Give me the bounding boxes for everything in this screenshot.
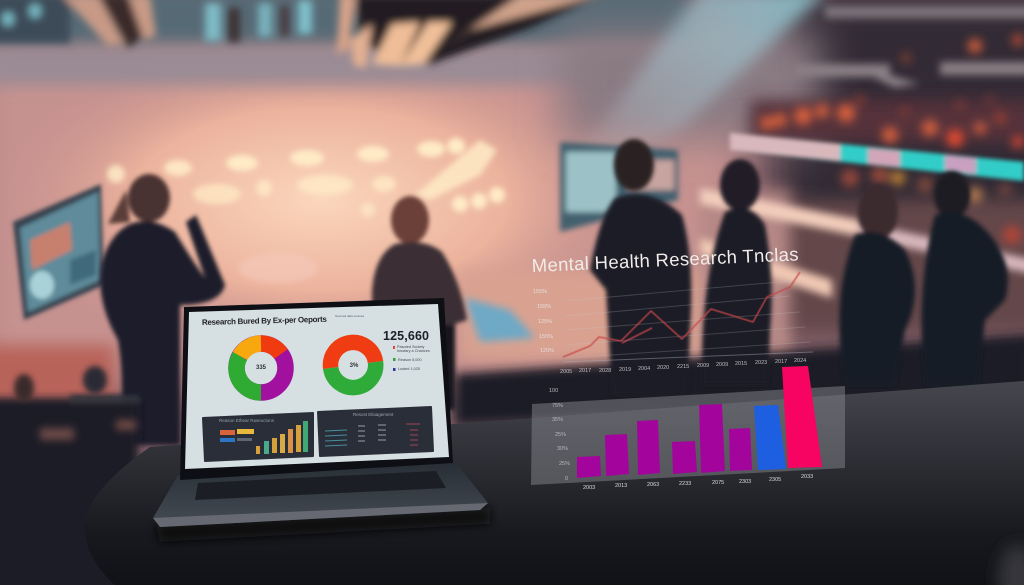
laptop screen <box>185 304 449 469</box>
background: light beam <box>560 0 828 180</box>
line chart x labels: 2009 <box>716 362 728 368</box>
left stage lights <box>107 138 505 283</box>
line chart axis <box>563 352 813 362</box>
silhouette: two men in suits <box>590 139 772 395</box>
bar chart x labels: 2305 <box>769 477 781 483</box>
dashboard legend: Pasoted Scolety <box>397 345 425 349</box>
dashboard legend <box>393 345 430 371</box>
line chart x labels: 2005 <box>560 369 572 375</box>
bar chart x labels: 2303 <box>739 479 751 485</box>
background: ceiling trusses <box>0 0 600 68</box>
bar chart y labels: 30% <box>557 446 568 452</box>
back rail band <box>455 334 1024 425</box>
line chart: Mental Health Research Trends <box>531 243 813 375</box>
bar chart y labels: 0 <box>565 476 568 482</box>
dark railing left <box>0 366 140 585</box>
laptop base front edge <box>153 503 488 527</box>
table <box>84 381 1024 585</box>
line chart x labels: 2023 <box>755 360 767 366</box>
bar chart <box>549 366 822 491</box>
line chart y labels: 155% <box>539 334 553 340</box>
bar chart y labels: 25% <box>559 461 570 467</box>
donut chart 1 <box>236 344 286 392</box>
line chart x labels: 2017 <box>579 368 591 374</box>
bar chart x labels: 2075 <box>712 480 724 486</box>
line chart x labels: 2015 <box>735 361 747 367</box>
left video screen <box>13 184 104 320</box>
line chart grid <box>565 281 810 358</box>
line chart y labels: 155% <box>533 289 547 295</box>
dashboard title: Research Bured By Ex-per Oeports <box>202 315 328 327</box>
led ribbon <box>730 133 1024 181</box>
bar chart bars <box>577 366 822 478</box>
white rails <box>700 188 1024 298</box>
line chart x labels: 2215 <box>677 364 689 370</box>
dashboard legend: Lusted 1,025 <box>398 367 420 371</box>
donut 1 label: 335 <box>256 365 267 371</box>
mini panel: bar chart: Reason Ethear Raseuctons <box>219 418 275 423</box>
bar chart y labels: 100 <box>549 388 558 394</box>
mini panel: table: Resost Eliaagement <box>353 412 394 417</box>
silhouette: man center-left <box>372 196 467 410</box>
background: crowd seating right <box>750 6 1024 244</box>
line chart x labels: 2024 <box>794 358 806 364</box>
line chart y labels: 125% <box>538 319 552 325</box>
mini panel: bar chart <box>203 413 313 461</box>
bar chart x labels: 2013 <box>615 483 627 489</box>
center video screen <box>560 142 678 232</box>
laptop <box>153 298 490 542</box>
line chart y labels <box>533 289 554 354</box>
line series <box>563 272 800 357</box>
bar chart y labels: 35% <box>552 417 563 423</box>
bar chart x labels <box>583 474 813 491</box>
line chart x labels: 2009 <box>697 363 709 369</box>
bar chart x labels: 2003 <box>583 485 595 491</box>
bar chart y labels <box>549 388 570 482</box>
line chart y labels: 155% <box>537 304 551 310</box>
line chart y labels: 120% <box>540 348 554 354</box>
silhouette: woman at left <box>100 174 225 445</box>
line chart x labels: 2028 <box>599 368 611 374</box>
line chart title: Mental Health Research Tnclas <box>531 243 799 276</box>
line chart x labels <box>560 358 806 375</box>
dashboard subtitle: Sourced data sources <box>335 314 365 318</box>
mini panel: table <box>318 407 433 456</box>
bar chart x labels: 2063 <box>647 482 659 488</box>
line chart x labels: 2017 <box>775 359 787 365</box>
bar chart y labels: 25% <box>555 432 566 438</box>
laptop base <box>153 458 488 527</box>
donut chart 2 <box>331 342 376 388</box>
line chart x labels: 2019 <box>619 367 631 373</box>
line chart x labels: 2020 <box>657 365 669 371</box>
glass chart reflection panel <box>531 386 845 485</box>
keyboard <box>195 471 446 500</box>
blue stage wedge <box>465 298 535 342</box>
bar chart x labels: 2033 <box>801 474 813 480</box>
laptop lid <box>180 298 453 480</box>
big number: 125,660 <box>383 329 429 343</box>
foreground blur object <box>998 544 1024 585</box>
bar chart y labels: 75% <box>552 403 563 409</box>
bar chart x labels: 2233 <box>679 481 691 487</box>
donut 2 label: 3% <box>350 363 359 369</box>
line chart x labels: 2004 <box>638 366 650 372</box>
dashboard legend: Insotary a Chances <box>397 349 430 353</box>
laptop shadow <box>155 508 490 542</box>
silhouettes: people at right <box>839 171 1008 385</box>
dashboard legend: Reason 5,000 <box>398 358 422 362</box>
